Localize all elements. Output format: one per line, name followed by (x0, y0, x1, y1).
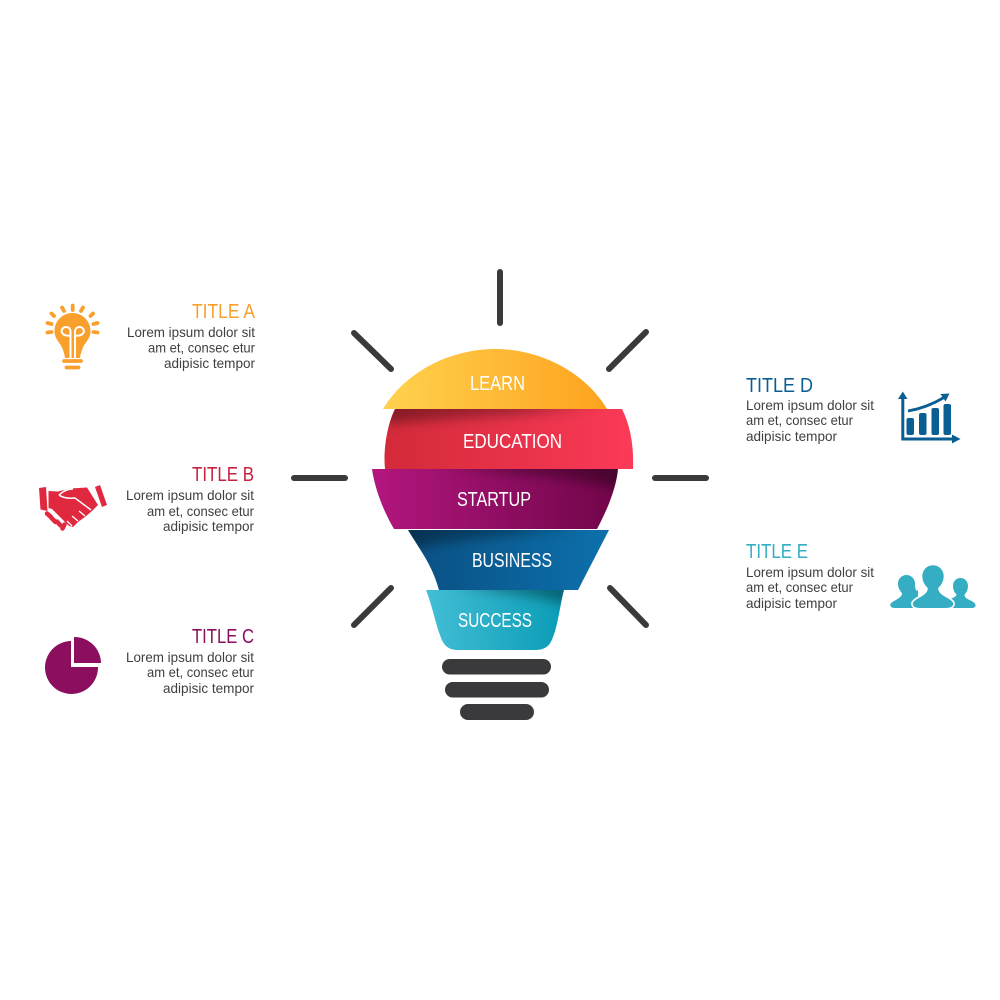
segment: success (426, 590, 564, 650)
description: adipisic tempor (746, 428, 837, 444)
panel: title E (746, 541, 976, 611)
segment: learn (383, 349, 607, 409)
icon: handshake (39, 485, 107, 528)
description: am et, consec etur (746, 579, 853, 595)
icon: light bulb (48, 306, 98, 368)
bulb base (442, 659, 551, 720)
description: adipisic tempor (163, 680, 254, 696)
title: TITLE C (192, 626, 254, 648)
description: am et, consec etur (746, 412, 853, 428)
panel: title A (48, 301, 256, 371)
panel: title B (39, 464, 254, 534)
segment: learn: LEARN (470, 373, 525, 395)
lightbulb diagram (372, 349, 633, 720)
description: Lorem ipsum dolor sit (746, 397, 874, 413)
description (126, 649, 254, 696)
segment: success: SUCCESS (458, 610, 532, 632)
description: Lorem ipsum dolor sit (126, 487, 254, 503)
description: am et, consec etur (147, 503, 254, 519)
segment: business: BUSINESS (472, 550, 552, 572)
description: adipisic tempor (164, 355, 255, 371)
description (126, 487, 254, 534)
description: am et, consec etur (147, 664, 254, 680)
segment: startup: STARTUP (457, 489, 531, 511)
rays around the bulb (294, 272, 706, 625)
description: adipisic tempor (163, 518, 254, 534)
segment: business (408, 530, 609, 590)
icon: group of people (890, 564, 976, 609)
description: Lorem ipsum dolor sit (126, 649, 254, 665)
description: am et, consec etur (148, 340, 255, 356)
description (746, 397, 874, 444)
description: adipisic tempor (746, 595, 837, 611)
description: Lorem ipsum dolor sit (127, 324, 255, 340)
segment: education: EDUCATION (463, 431, 562, 453)
icon: pie chart (45, 637, 101, 694)
title: TITLE D (746, 375, 813, 397)
description: Lorem ipsum dolor sit (746, 564, 874, 580)
description (746, 564, 874, 611)
title: TITLE B (192, 464, 254, 486)
panel: title D (746, 375, 960, 444)
description (127, 324, 255, 371)
title: TITLE A (192, 301, 256, 323)
title: TITLE E (746, 541, 808, 563)
icon: growth chart (898, 392, 960, 444)
segment: startup (372, 469, 618, 529)
panel: title C (45, 626, 254, 696)
segment: education (384, 409, 634, 469)
